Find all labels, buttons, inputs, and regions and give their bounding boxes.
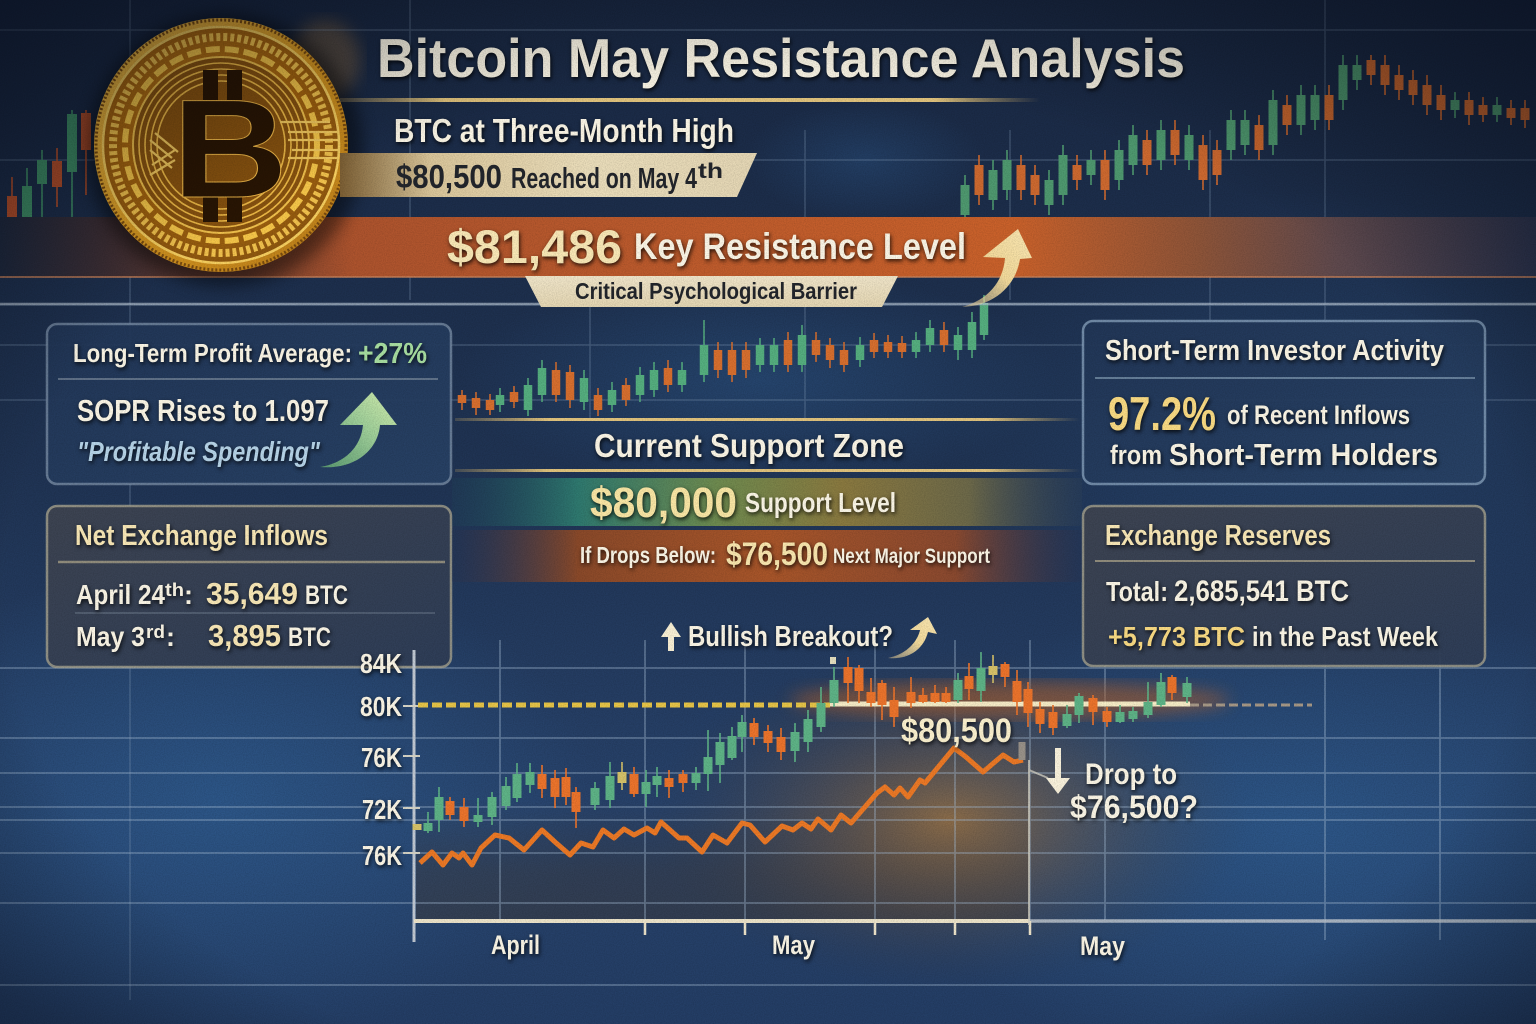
critical resistance band — [0, 217, 1536, 304]
from short-term holders: from — [1110, 440, 1162, 470]
banner: $80,500 reached on May 4th: $80,500 — [396, 158, 502, 195]
next support band: Next Major Support — [833, 545, 990, 568]
weekly change — [1108, 621, 1438, 652]
price line — [420, 748, 1023, 865]
long-term profit average: Long-Term Profit Average: — [73, 338, 352, 368]
reserves heading: Exchange Reserves — [1105, 520, 1331, 552]
inflows heading: Net Exchange Inflows — [75, 520, 328, 552]
candlesticks — [417, 652, 1187, 833]
short-term heading: Short-Term Investor Activity — [1105, 335, 1444, 367]
may inflow — [76, 618, 331, 653]
support band: $80,000 — [590, 479, 737, 527]
drop label: $76,500? — [1070, 789, 1198, 825]
weekly change: in the Past Week — [1252, 621, 1438, 652]
axes — [403, 650, 1536, 942]
next support band: If Drops Below: — [580, 542, 716, 568]
current support zone section — [452, 418, 1082, 582]
lower chart — [403, 650, 1536, 942]
weekly change: +5,773 BTC — [1108, 621, 1245, 652]
banner: $80,500 reached on May 4th: Reached on May 4 — [511, 163, 697, 195]
title: Bitcoin May Resistance Analysis — [377, 27, 1185, 89]
arrow: drop down — [1046, 748, 1070, 794]
total reserves: Total: — [1106, 576, 1168, 607]
resistance value: $81,486 — [447, 220, 622, 273]
panel: short-term investor activity — [1083, 321, 1485, 484]
candlestick chart: top left — [12, 110, 86, 246]
bitcoin symbol: B — [172, 70, 288, 227]
ribbon: critical psychological barrier: Critical Psychological Barrier — [575, 278, 857, 304]
panel: net exchange inflows — [47, 506, 451, 667]
month labels — [491, 930, 1125, 961]
april inflow: BTC — [305, 580, 348, 610]
profitable spending: "Profitable Spending" — [77, 436, 321, 467]
arrow: breakout up to resistance — [962, 229, 1032, 307]
arrow: curved up — [888, 617, 937, 658]
may inflow: 3,895 — [208, 618, 281, 653]
drop label: Drop to — [1085, 758, 1177, 791]
april inflow: th — [165, 580, 184, 600]
SOPR value: SOPR Rises to 1.097 — [77, 393, 329, 428]
orange haze at support — [790, 682, 1230, 718]
next support band: $76,500 — [726, 536, 828, 572]
subtitle: BTC at Three-Month High — [394, 112, 734, 149]
candlestick chart: top right — [965, 55, 1525, 218]
total reserves: 2,685,541 BTC — [1174, 575, 1349, 608]
axis labels: 84K — [360, 648, 402, 679]
profit percent: +27% — [358, 338, 427, 370]
april inflow: 35,649 — [206, 576, 298, 611]
axis labels: 76K — [362, 840, 402, 871]
may inflow: : — [166, 622, 175, 652]
drop label — [1070, 758, 1198, 825]
panel: long-term profit — [47, 324, 451, 484]
axis labels: 80K — [360, 691, 402, 722]
may inflow: rd — [146, 622, 165, 642]
candlestick chart: middle — [462, 295, 984, 416]
may inflow: May 3 — [76, 621, 145, 652]
support band — [452, 478, 1082, 527]
month labels: May — [1080, 931, 1125, 961]
arrow: small up — [661, 622, 681, 651]
97.2%: 97.2% — [1108, 387, 1216, 440]
may inflow: BTC — [288, 622, 331, 652]
axis labels: 76K — [361, 742, 402, 773]
banner: $80,500 reached on May 4th: th — [698, 160, 723, 183]
month labels: May — [772, 930, 815, 960]
bullish breakout callout — [661, 617, 937, 658]
divider under title — [340, 98, 1040, 102]
axis labels — [360, 648, 402, 871]
month labels: April — [491, 930, 540, 960]
bullish breakout callout: Bullish Breakout? — [688, 621, 893, 653]
total reserves — [1106, 575, 1349, 608]
next support band — [452, 530, 1082, 582]
price label: $80,500: $80,500 — [901, 712, 1012, 750]
of recent inflows: of Recent Inflows — [1227, 400, 1410, 430]
support zone heading: Current Support Zone — [594, 427, 904, 464]
resistance label: Key Resistance Level — [634, 226, 966, 267]
drop line — [1018, 742, 1026, 760]
support band: Support Level — [745, 487, 896, 518]
april inflow — [76, 576, 348, 611]
from short-term holders: Short-Term Holders — [1169, 437, 1438, 472]
panel: exchange reserves — [1083, 506, 1485, 666]
april inflow: : — [184, 580, 193, 610]
bitcoin coin — [87, 14, 363, 286]
banner: $80,500 reached on May 4th — [340, 153, 757, 197]
arrow: green up — [320, 392, 397, 467]
support line — [418, 704, 1312, 705]
axis labels: 72K — [362, 794, 402, 825]
april inflow: April 24 — [76, 579, 165, 610]
